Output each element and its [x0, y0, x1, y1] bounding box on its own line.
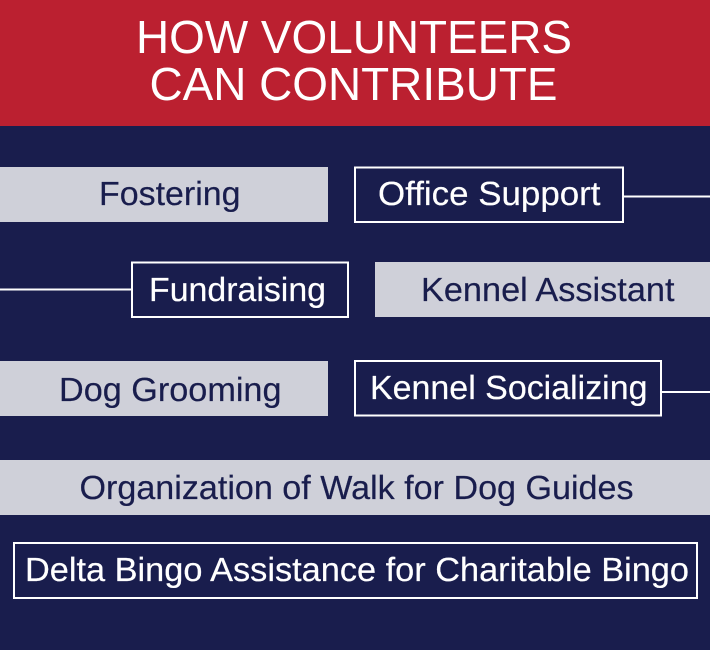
item: Kennel Socializing: Kennel Socializing — [370, 370, 648, 407]
item: Delta Bingo Assistance for Charitable Bingo: Delta Bingo Assistance for Charitable Bingo — [25, 552, 689, 589]
item: Fostering — [0, 167, 328, 222]
title banner — [0, 0, 710, 126]
item: Dog Grooming — [0, 361, 328, 416]
item: Fundraising: Fundraising — [149, 272, 326, 309]
item: Kennel Assistant: Kennel Assistant — [421, 272, 675, 309]
item: Office Support: Office Support — [378, 176, 601, 213]
item: Dog Grooming: Dog Grooming — [59, 372, 282, 409]
title banner: HOW VOLUNTEERS — [136, 11, 572, 63]
item: Kennel Assistant — [375, 262, 710, 317]
item: Organization of Walk for Dog Guides: Organization of Walk for Dog Guides — [80, 470, 634, 507]
item: Delta Bingo Assistance for Charitable Bingo — [14, 543, 697, 598]
item: Fostering: Fostering — [99, 176, 240, 213]
title banner: CAN CONTRIBUTE — [150, 58, 558, 110]
item: Organization of Walk for Dog Guides — [0, 460, 710, 515]
item: Office Support — [355, 168, 710, 222]
item: Kennel Socializing — [355, 361, 710, 416]
item: Fundraising — [0, 262, 348, 317]
